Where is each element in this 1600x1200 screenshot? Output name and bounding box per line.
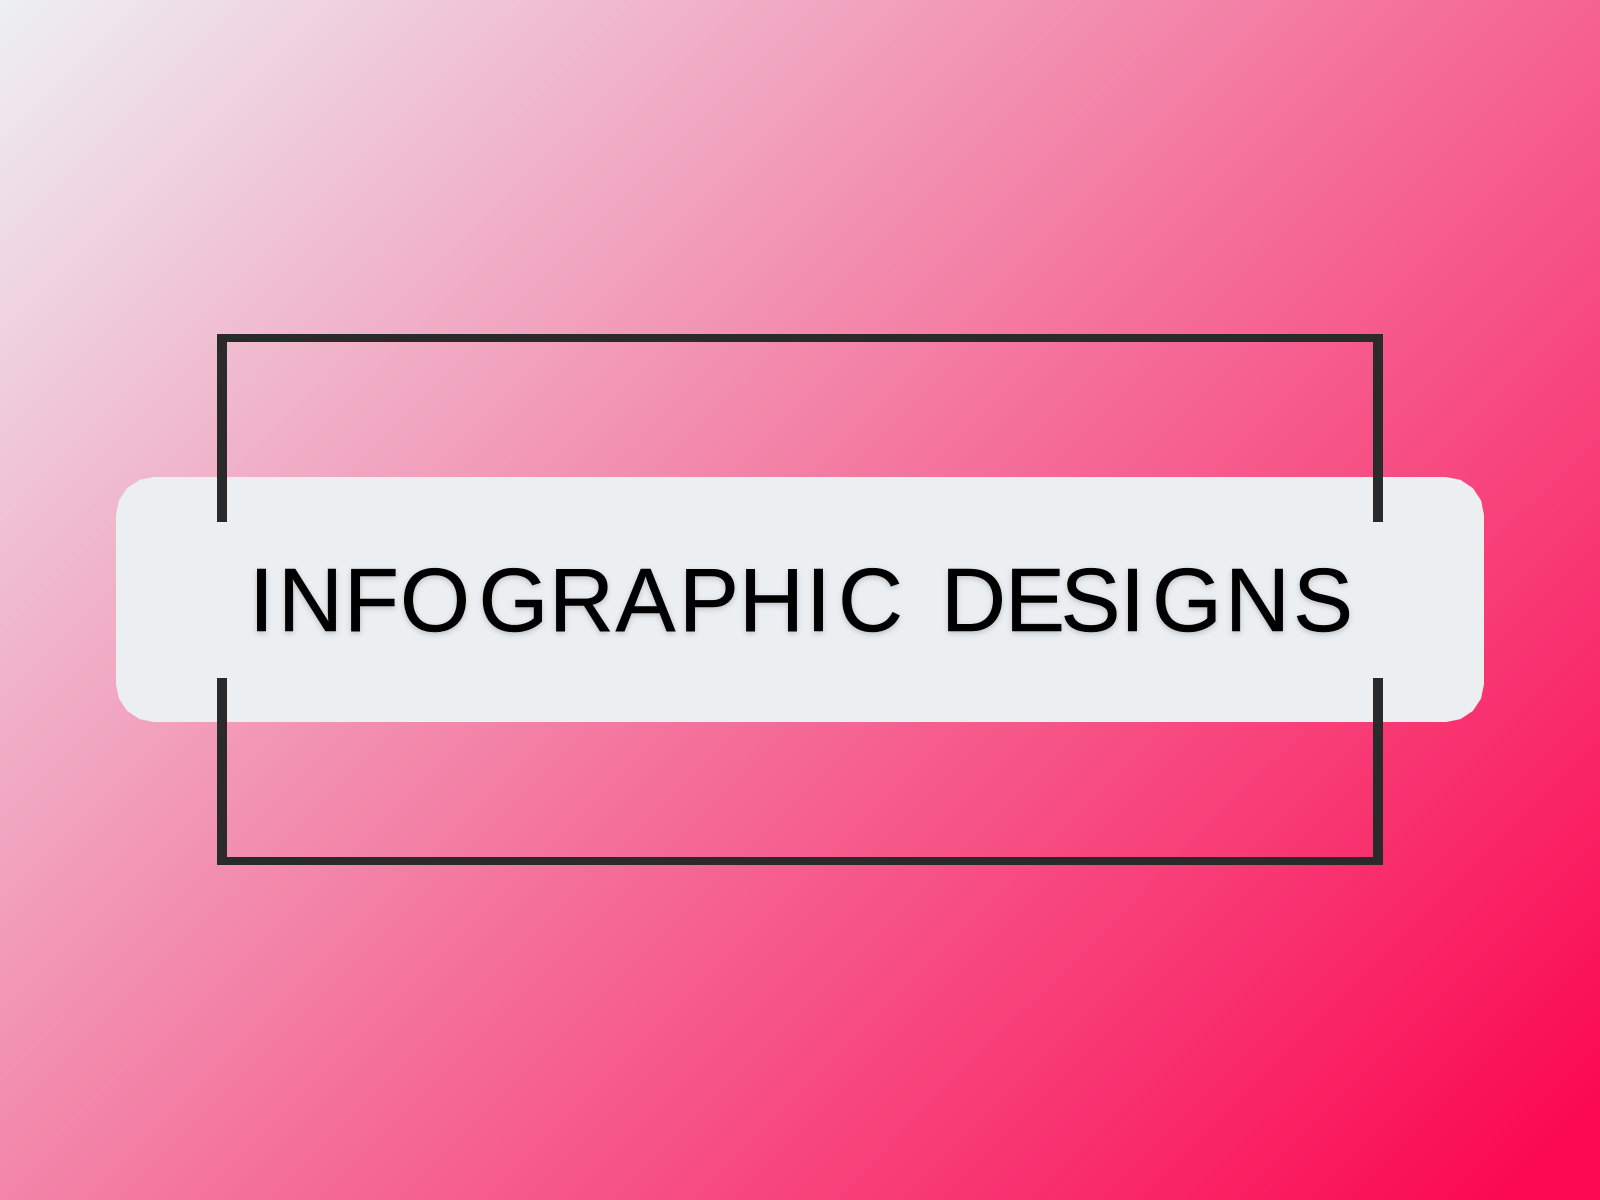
title: INFOGRAPHIC DESIGNS bbox=[249, 551, 1353, 651]
frame: top bracket bbox=[217, 334, 1383, 522]
frame: bottom bracket bbox=[217, 678, 1383, 865]
title panel bbox=[116, 477, 1484, 722]
